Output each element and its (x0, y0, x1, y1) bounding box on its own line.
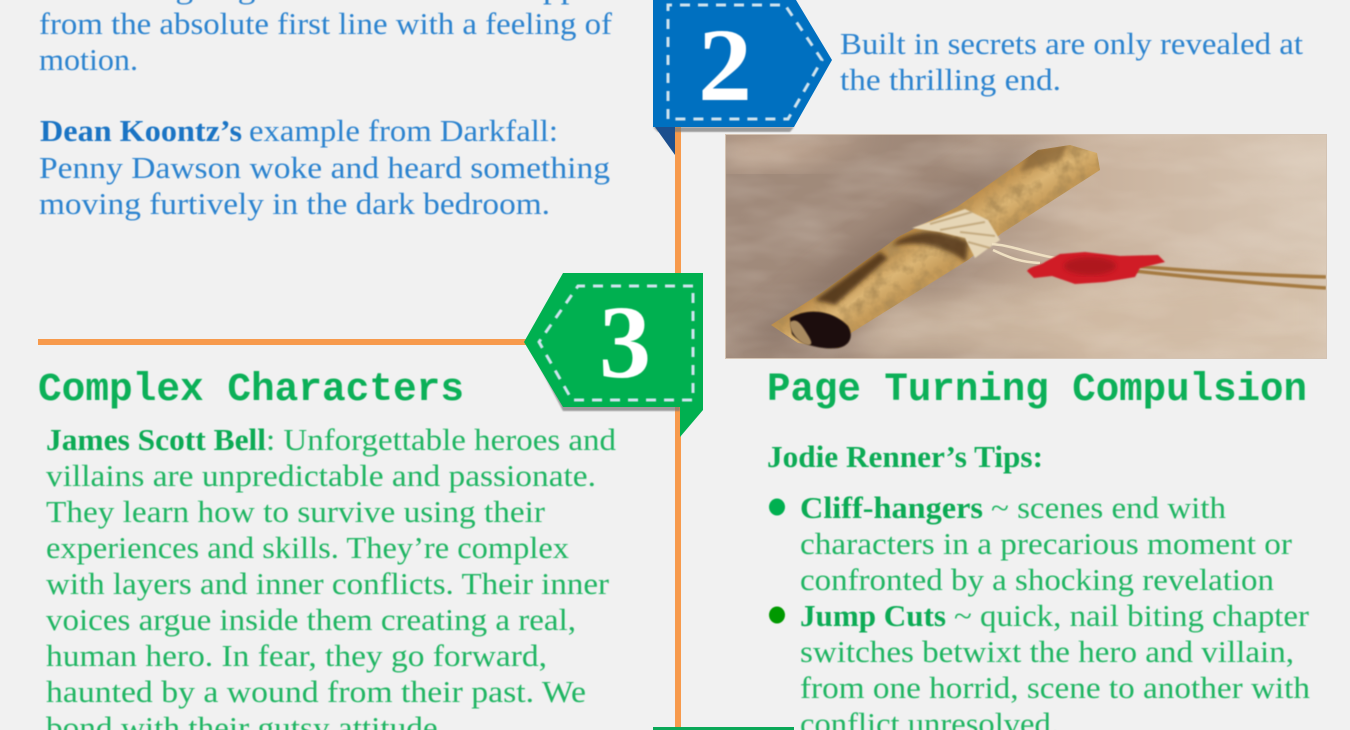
paper light areas (725, 134, 880, 170)
badge fold (680, 407, 703, 437)
badge: number 3 (524, 273, 703, 437)
text block: James Scott Bell on characters: haunted by a wound from their past. We (46, 674, 586, 709)
text block: James Scott Bell on characters: James Scott Bell (46, 422, 266, 457)
bullet: cliff-hangers (769, 498, 785, 516)
paper wrinkles (725, 134, 1327, 359)
red wax seal (1027, 252, 1165, 284)
text block: James Scott Bell on characters: : Unforgettable heroes and (266, 422, 617, 457)
text block: James Scott Bell on characters: voices argue inside them creating a real, (46, 602, 576, 637)
text block: James Scott Bell on characters: human hero. In fear, they go forward, (46, 638, 547, 673)
heading: Page Turning Compulsion: Page Turning Compulsion (767, 368, 1307, 413)
string to seal (992, 244, 1056, 263)
numeral 3: 3 (599, 285, 651, 400)
tip: cliff-hangers (800, 490, 1293, 597)
scroll mottling (777, 145, 1100, 342)
list: page turning tips (769, 490, 1311, 730)
text block: opening line advice: from the absolute first line with a feeling of (39, 6, 613, 41)
subheading: Jodie Renner's Tips: Jodie Renner’s Tips: (767, 439, 1043, 474)
badge fold (655, 127, 675, 155)
scroll open end (790, 312, 851, 348)
text block: built in secrets: Built in secrets are only revealed at (840, 26, 1303, 61)
orange horizontal connector (38, 339, 528, 345)
text block: opening line advice: Dean Koontz’s (40, 113, 242, 148)
next badge top edge (653, 727, 794, 730)
text block: James Scott Bell on characters: experiences and skills. They’re complex (46, 530, 570, 565)
text block: built in secrets (840, 26, 1303, 97)
bullet: jump cuts (769, 606, 785, 624)
tip: cliff-hangers: characters in a precarious moment or (800, 526, 1293, 561)
text block: James Scott Bell on characters: They learn how to survive using their (46, 494, 546, 529)
tip: cliff-hangers: confronted by a shocking revelation (800, 562, 1275, 597)
text block: opening line advice (39, 0, 613, 221)
tip: jump cuts (800, 598, 1311, 730)
text block: James Scott Bell on characters: villains are unpredictable and passionate. (46, 458, 596, 493)
badge: number 2 (653, 0, 832, 155)
text block: built in secrets: the thrilling end. (840, 62, 1061, 97)
scroll cast shadow (740, 145, 1045, 345)
text block: opening line advice: example from Darkfall: (249, 113, 558, 148)
tip: jump cuts: ~ quick, nail biting chapter (954, 598, 1310, 633)
tip: jump cuts: switches betwixt the hero and villain, (800, 634, 1294, 669)
numeral 2: 2 (698, 8, 752, 123)
string tail (1135, 266, 1326, 288)
text block: opening line advice: moving furtively in the dark bedroom. (39, 186, 550, 221)
orange vertical timeline (675, 120, 681, 730)
heading: Complex Characters: Complex Characters (38, 368, 464, 413)
photo: rolled parchment scroll with red wax seal (725, 134, 1327, 359)
tip: jump cuts: Jump Cuts (800, 598, 946, 633)
text block: opening line advice: Penny Dawson woke and heard something (39, 150, 610, 185)
tip: cliff-hangers: Cliff-hangers (800, 490, 983, 525)
scroll body (771, 145, 1100, 348)
tip: cliff-hangers: ~ scenes end with (991, 490, 1227, 525)
tip: jump cuts: from one horrid, scene to another with (800, 670, 1311, 705)
text block: James Scott Bell on characters (46, 422, 617, 730)
text block: James Scott Bell on characters: with layers and inner conflicts. Their inner (46, 566, 610, 601)
twine binding (912, 209, 1000, 258)
text block: opening line advice: motion. (39, 42, 138, 77)
